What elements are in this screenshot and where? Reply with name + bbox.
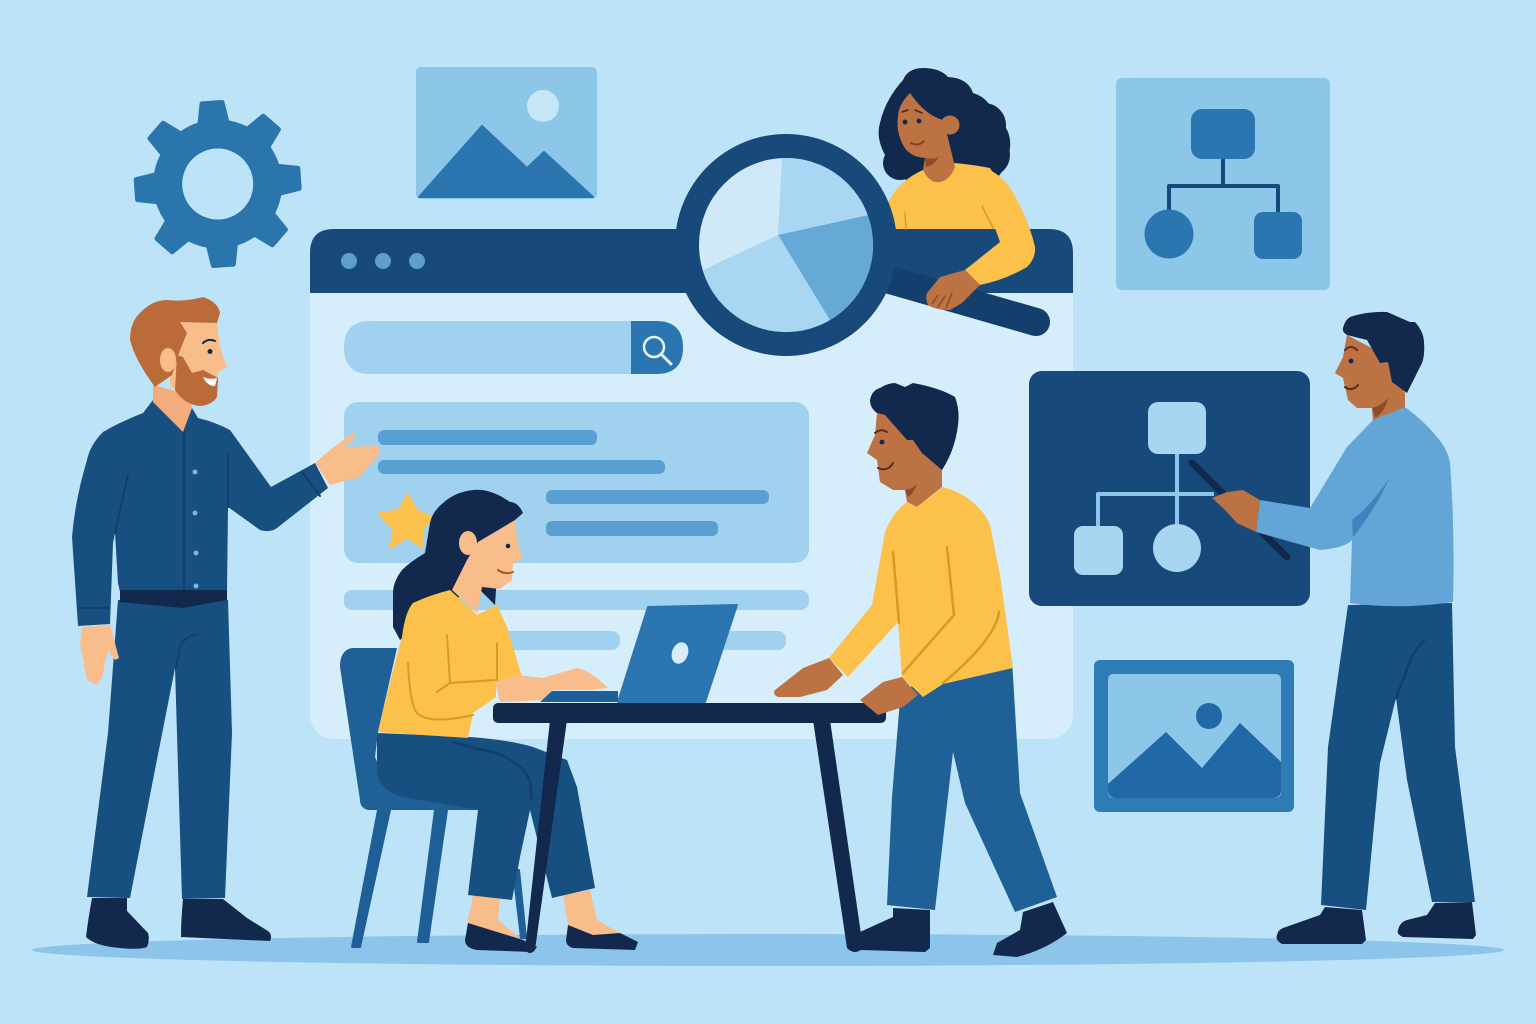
belt [120,590,227,608]
hair back [393,490,523,640]
face and neck [898,93,955,182]
hair [130,297,220,387]
neck [153,385,192,432]
pointer [1192,463,1287,557]
shoes [1277,907,1366,944]
beard [175,355,218,406]
sweater [1256,407,1454,606]
sweater folds [893,547,999,683]
right hand [315,433,380,485]
magnifying glass [676,134,1050,356]
trousers [887,660,1057,912]
man left with beard [72,297,380,949]
diagram card top right [1116,78,1330,290]
icon: gear [136,102,299,266]
standing man centre [774,383,1067,957]
face and neck [452,520,523,613]
man right with pointer [1192,312,1476,944]
hair [879,68,1010,190]
laptop [540,605,737,702]
result lines [344,590,809,610]
legs [377,733,595,900]
table [493,703,886,953]
hands [774,658,843,697]
trousers [1321,603,1475,910]
hands [495,668,608,702]
shoes [860,908,930,952]
hand [1212,490,1260,532]
trousers [87,600,232,899]
sweater [378,590,522,738]
woman behind magnifier [879,68,1010,229]
left hand [80,625,119,685]
neck and head [1335,335,1405,422]
sweater [829,487,1013,697]
shirt details [78,430,320,608]
feet [467,895,520,938]
pie chart in lens [702,158,873,332]
neck and head [867,413,942,507]
seated woman [377,490,638,952]
sweater folds [408,635,497,720]
shirt [72,400,328,626]
woman's arm and hand on magnifier [926,168,1035,310]
image card top [416,67,597,199]
shoes [86,898,149,949]
shoes [465,923,537,952]
ground shadow [32,934,1504,966]
browser window [310,229,1073,739]
result card [344,402,809,563]
search bar [344,321,683,374]
chair [340,648,526,947]
hair [1343,312,1424,393]
hair [870,383,959,470]
ear [160,348,176,372]
image card bottom right [1094,660,1294,812]
head [170,322,227,403]
window dots [341,253,425,269]
dark diagram panel [1029,371,1310,606]
icon: star [378,493,433,549]
sweater torso [888,163,1010,229]
